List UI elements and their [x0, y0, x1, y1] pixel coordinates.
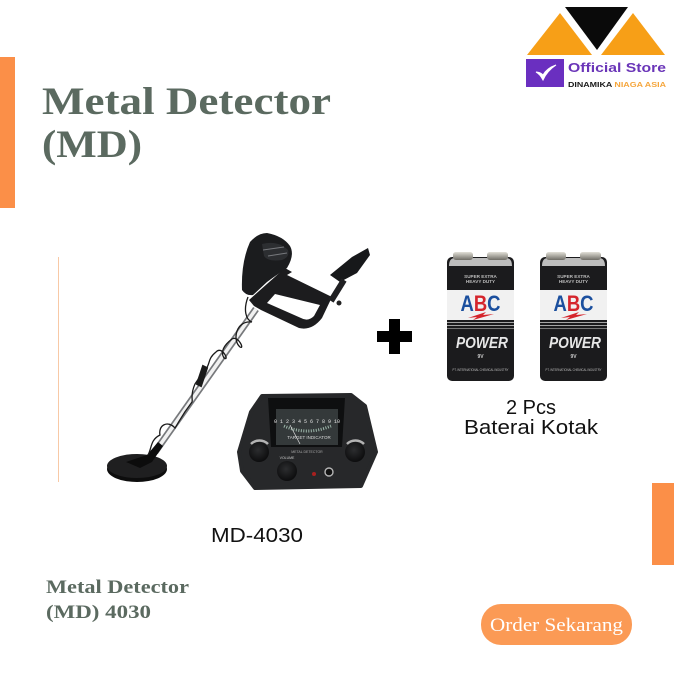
top label: SUPER EXTRA [464, 274, 498, 279]
right knob [345, 440, 365, 462]
battery body [447, 257, 514, 381]
battery caption: Baterai Kotak [464, 417, 599, 439]
control panel close-up [239, 395, 376, 488]
logo purple check badge [526, 59, 564, 87]
analog meter: TARGET INDICATOR [287, 435, 331, 440]
right orange accent bar [652, 483, 674, 565]
logo: official store [526, 7, 667, 89]
detector control box [242, 233, 292, 295]
model label: MD-4030 [211, 525, 303, 547]
battery body [540, 257, 607, 381]
power label: POWER [456, 335, 508, 352]
plus sign [377, 319, 412, 354]
white band [447, 290, 514, 320]
battery right: PT. INTERNATIONAL CHEMICAL INDUSTRY [546, 368, 602, 372]
battery caption: 2 Pcs [506, 397, 556, 419]
analog meter: 0 1 2 3 4 5 6 7 8 9 10 [274, 419, 340, 425]
logo black triangle [565, 7, 628, 50]
white band [540, 290, 607, 320]
left orange accent bar [0, 57, 15, 208]
product name: Metal Detector [46, 577, 190, 598]
battery left [447, 252, 514, 381]
top label: SUPER EXTRA [557, 274, 591, 279]
title [42, 80, 331, 166]
order button: Order Sekarang [490, 615, 624, 636]
earphone jack [325, 468, 333, 476]
ABC brand: ABC [554, 291, 594, 316]
logo right triangle [601, 13, 665, 55]
terminals [546, 252, 601, 261]
logo company name: DINAMIKA NIAGA ASIA [568, 80, 667, 89]
volume knob: VOLUME [280, 456, 295, 460]
metal detector device [107, 233, 370, 482]
product name: (MD) 4030 [46, 602, 151, 623]
battery left: HEAVY DUTY [466, 279, 495, 284]
logo official store text: Official Store [568, 60, 666, 75]
order button [481, 604, 632, 645]
battery right [540, 252, 607, 381]
ABC brand: ABC [460, 291, 501, 316]
battery right: HEAVY DUTY [559, 279, 588, 284]
product name [46, 577, 190, 623]
title: Metal Detector [42, 80, 331, 123]
detector armrest [330, 248, 370, 306]
detector handle [249, 268, 332, 329]
panel label: METAL DETECTOR [291, 450, 323, 454]
power label: POWER [549, 335, 601, 352]
title: (MD) [42, 123, 142, 166]
analog meter [268, 398, 345, 447]
detector shaft [155, 309, 256, 452]
detector inline clip [197, 366, 207, 386]
battery caption [464, 397, 599, 439]
battery left: 9V [477, 354, 484, 360]
detector cable [148, 297, 252, 455]
red indicator [312, 472, 316, 476]
panel body [239, 395, 376, 488]
vertical accent line [58, 257, 59, 482]
battery left: PT. INTERNATIONAL CHEMICAL INDUSTRY [452, 368, 509, 372]
battery right: 9V [570, 354, 577, 360]
detector coil [107, 442, 167, 482]
logo left triangle [527, 13, 592, 55]
left knob [249, 440, 269, 462]
terminals [453, 252, 508, 261]
